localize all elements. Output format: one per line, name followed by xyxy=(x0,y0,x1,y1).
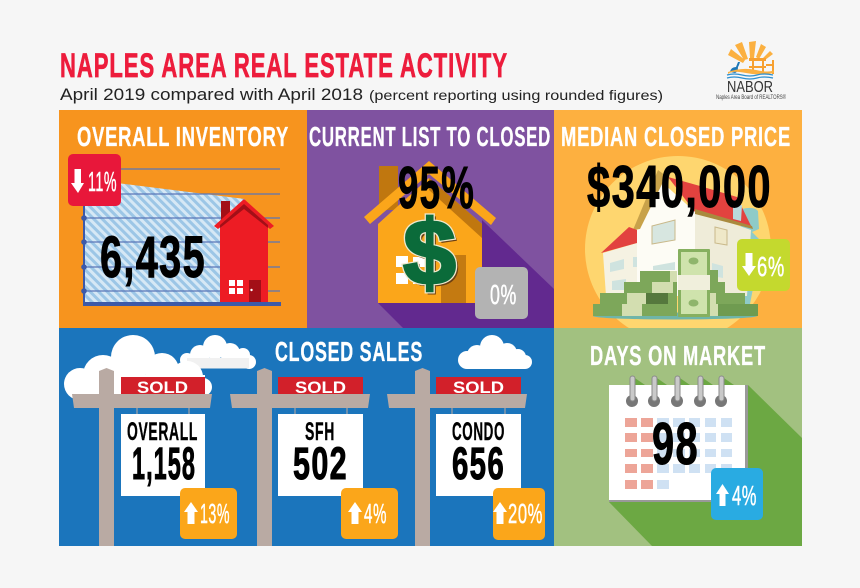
panel: overall inventory xyxy=(59,110,307,328)
illustration: house with money xyxy=(593,170,762,320)
icon: calendar xyxy=(609,376,748,502)
icon: orange house xyxy=(364,161,496,303)
title: NAPLES AREA REAL ESTATE ACTIVITY xyxy=(60,47,508,85)
badge: down 6% xyxy=(737,239,790,291)
badge: up 4% xyxy=(711,468,763,520)
value: 6,435: 6,435 xyxy=(100,225,206,290)
panel: closed sales xyxy=(59,328,554,546)
sign: condo xyxy=(387,368,545,546)
logo: NABOR xyxy=(716,41,786,101)
house shadow xyxy=(378,220,554,328)
value: $340,000: $340,000 xyxy=(587,154,772,220)
heading: DAYS ON MARKET xyxy=(590,340,766,371)
sign: overall: 1,158 xyxy=(132,438,196,489)
sun circle xyxy=(585,156,771,342)
sign: condo: 20% xyxy=(508,498,543,529)
calendar shadow xyxy=(609,385,802,546)
sign: SFH: 4% xyxy=(364,498,387,529)
icon: dollar sign: $ xyxy=(403,202,456,304)
icon: red house xyxy=(214,199,274,302)
sign: SFH: SFH xyxy=(305,418,335,446)
icon: dollar sign: $ xyxy=(403,202,456,304)
badge: up 4%: 4% xyxy=(732,480,757,511)
value: 98: 98 xyxy=(652,411,699,477)
icon: large cloud xyxy=(64,335,212,400)
panel: median closed price xyxy=(554,110,802,342)
heading: OVERALL INVENTORY xyxy=(77,121,289,152)
panel: current list to closed xyxy=(307,110,554,328)
sign: condo: CONDO xyxy=(452,418,505,446)
heading: CLOSED SALES xyxy=(275,336,423,367)
sign: SFH: SOLD xyxy=(295,378,346,397)
icon: dollar sign: $ xyxy=(405,204,458,306)
sign: SFH: 502 xyxy=(293,438,348,489)
heading: CURRENT LIST TO CLOSED xyxy=(309,121,551,152)
badge: 0% xyxy=(475,267,528,319)
sign: condo: SOLD xyxy=(453,378,504,397)
badge: down 6%: 6% xyxy=(757,251,785,282)
area chart xyxy=(81,169,281,306)
badge: down 11% xyxy=(68,154,121,206)
icon: cloud xyxy=(458,335,532,369)
sign: overall: 13% xyxy=(200,498,230,529)
logo: NABOR: NABOR xyxy=(727,79,773,96)
logo: NABOR: Naples Area Board of REALTORS® xyxy=(716,93,786,101)
subtitle: April 2019 compared with April 2018 xyxy=(60,85,363,104)
panel: days on market xyxy=(554,328,802,546)
sign: overall: OVERALL xyxy=(127,418,198,446)
badge: 0%: 0% xyxy=(490,279,517,310)
value: 95%: 95% xyxy=(398,155,475,221)
sign: condo: 656 xyxy=(452,438,505,489)
sign: overall xyxy=(72,368,237,546)
icon: cloud xyxy=(180,335,256,369)
sign: overall: SOLD xyxy=(137,378,188,397)
badge: down 11%: 11% xyxy=(88,166,117,197)
subtitle note: (percent reporting using rounded figures) xyxy=(369,87,663,103)
sign: SFH xyxy=(230,368,398,546)
